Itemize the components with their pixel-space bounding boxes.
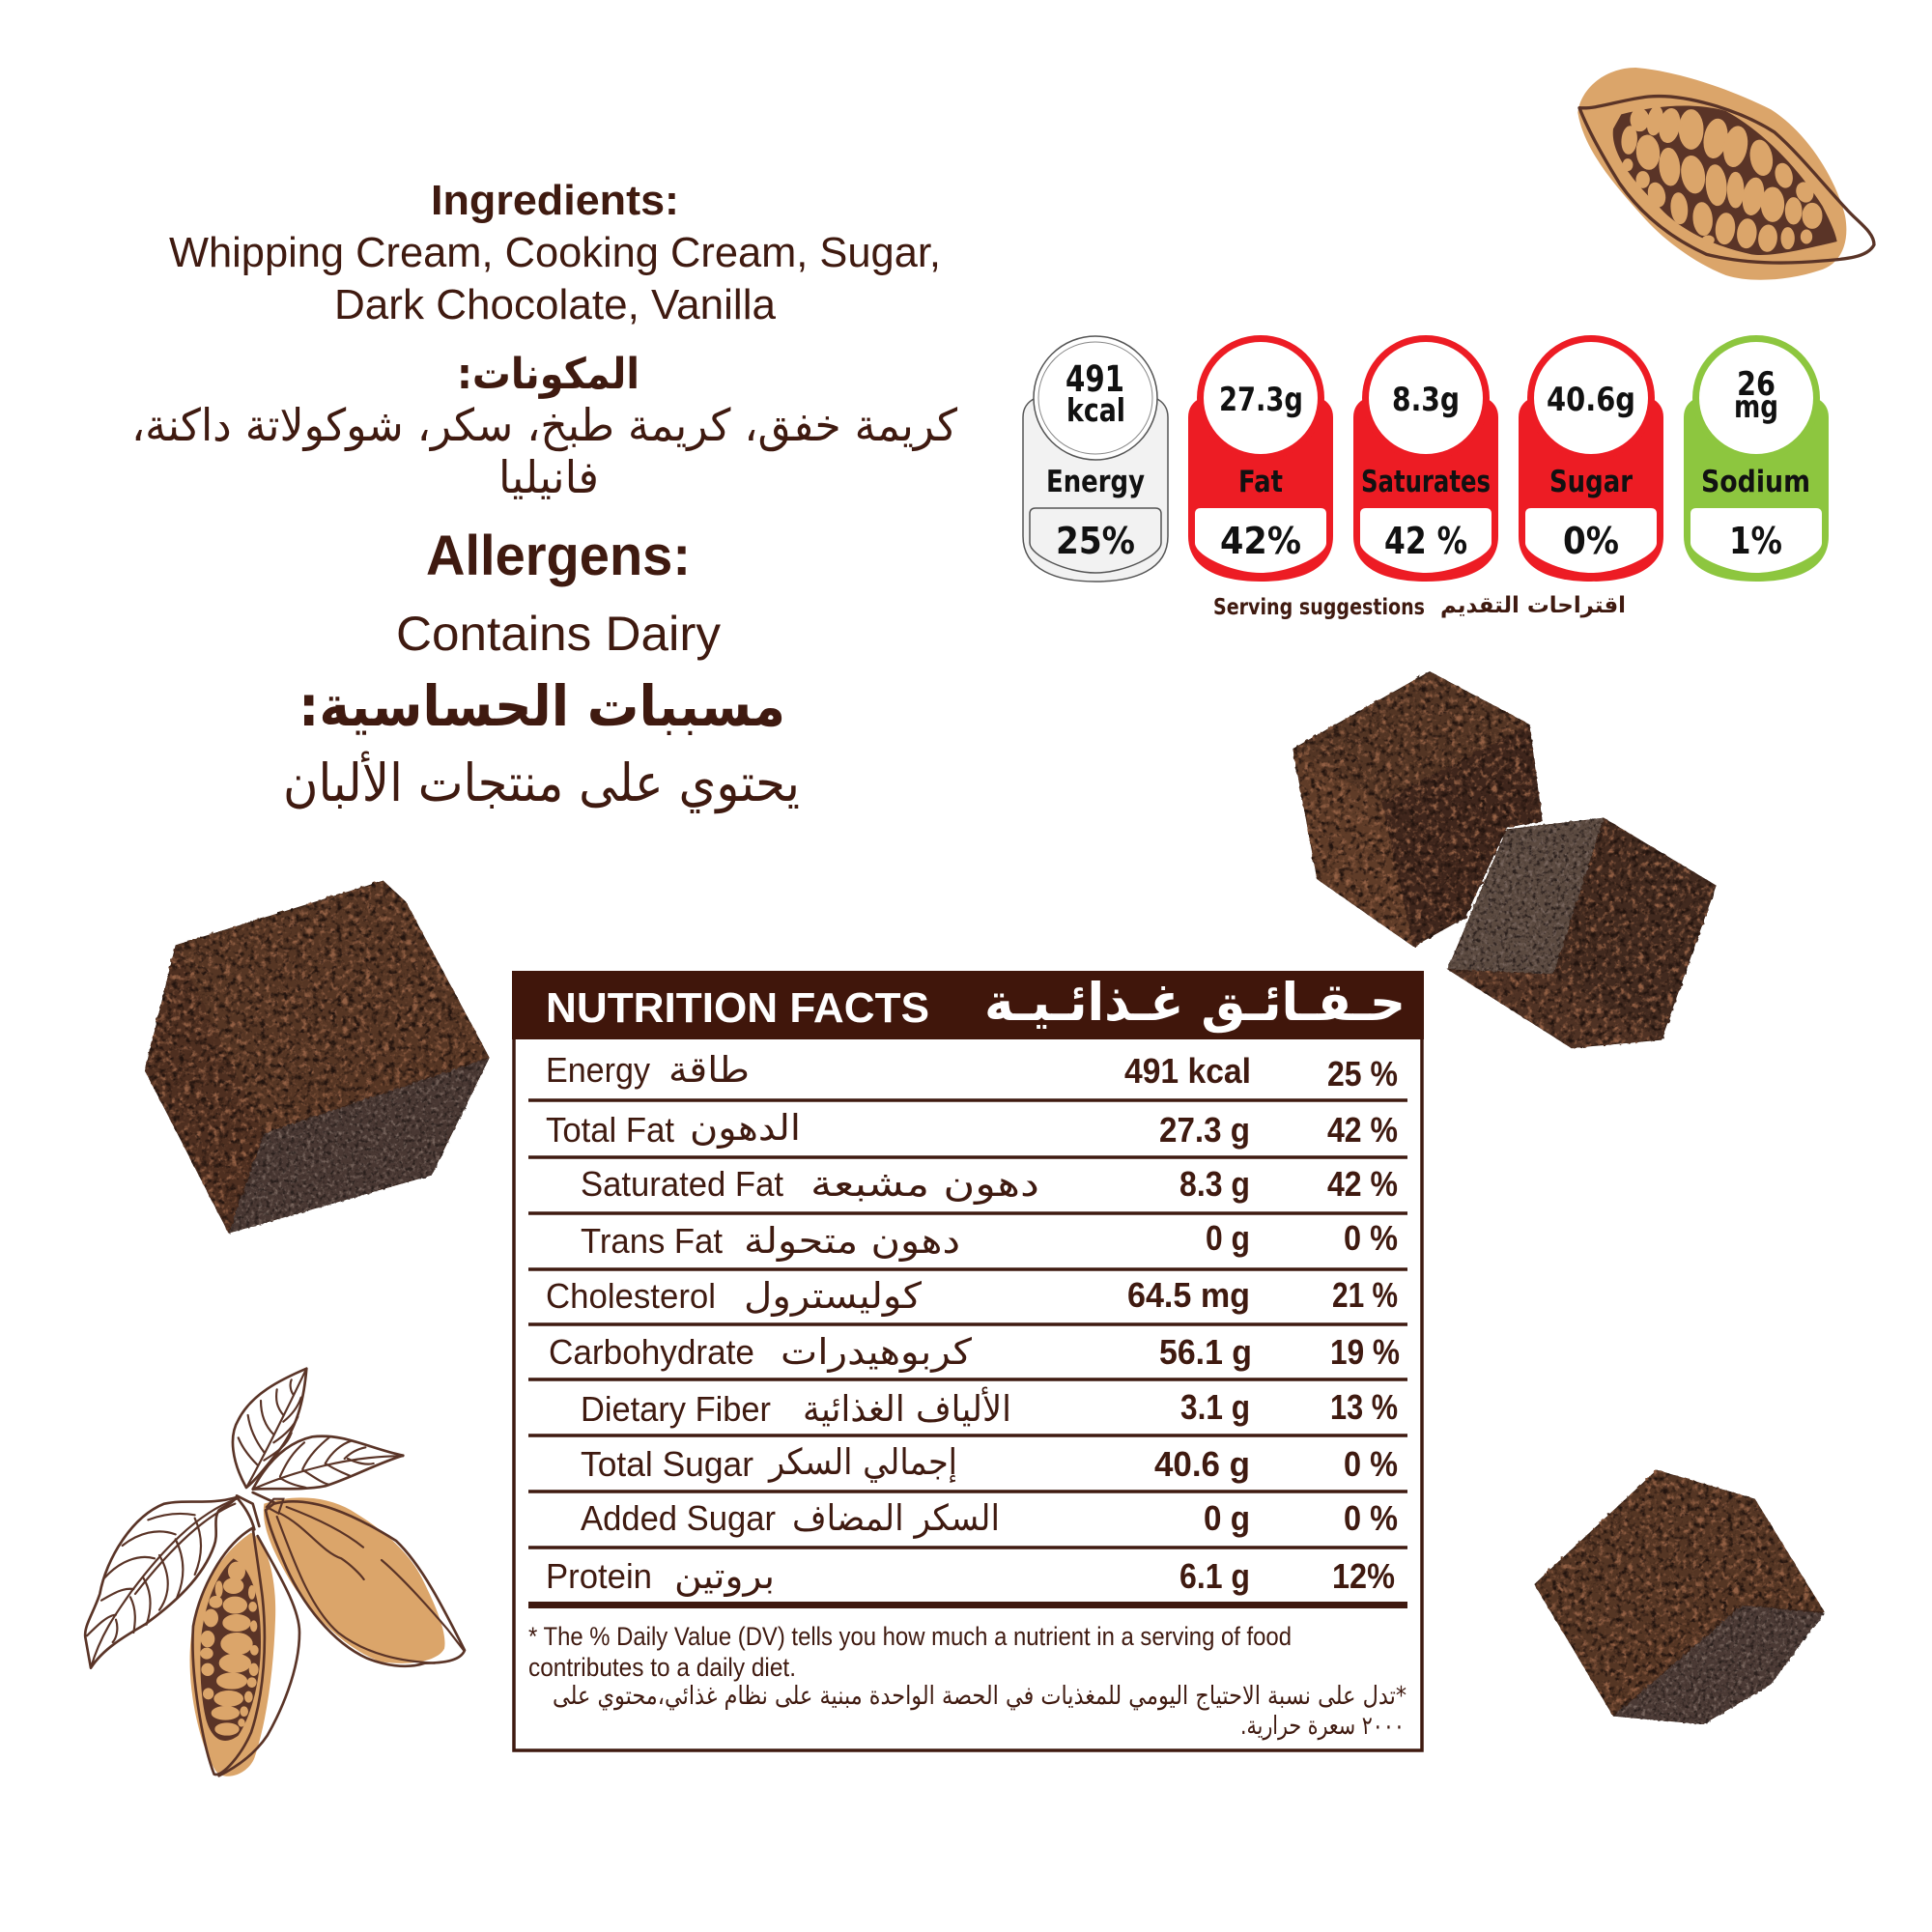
row: trans fat: دهون متحولة [744,1220,960,1262]
row: total sugar: 0 % [1344,1444,1398,1484]
leaf: top [233,1369,306,1488]
serving suggestions caption [1213,593,1626,620]
heading: ingredients: Ingredients: [431,177,679,224]
row: total fat: 27.3 g [1159,1110,1250,1150]
footnote [528,1622,1406,1741]
ingredients list English: Whipping Cream, Cooking Cream, Sugar, [169,229,941,276]
badge: sugar: Sugar [1549,465,1634,499]
row: total fat [546,1107,1398,1150]
row: energy: Energy [546,1050,650,1090]
heading: allergens Arabic: مسببات الحساسية: [298,673,785,739]
leaf: left [85,1497,237,1668]
open pod outline and seeds [192,1528,299,1776]
ingredients list English [169,229,941,328]
leaf: right [253,1436,403,1490]
row: added sugar [581,1497,1398,1539]
heading: ingredients Arabic: المكونات: [457,350,639,399]
badge: sodium: 1% [1729,520,1782,562]
badge: sodium [1684,335,1829,582]
serving suggestions caption: اقتراحات التقديم [1440,593,1626,618]
table header [512,971,1424,1039]
heading: allergens: Allergens: [426,525,691,587]
badge: sodium: 26 [1737,365,1776,404]
row: saturated fat [581,1163,1398,1205]
badge: energy: kcal [1066,391,1125,429]
table header: NUTRITION FACTS [546,984,929,1032]
badge: saturates [1353,335,1498,582]
row: energy [546,1049,1398,1094]
row: protein: 12% [1332,1556,1395,1596]
table frame [514,976,1422,1750]
row: trans fat [581,1218,1398,1262]
row: protein [546,1555,1395,1597]
row: protein: بروتين [674,1555,775,1597]
row: energy: 491 kcal [1124,1051,1251,1091]
footnote: *تدل على نسبة الاحتياج اليومي للمغذيات في الحصة الواحدة مبنية على نظام غذائي،محتوي على [553,1682,1406,1711]
badge: energy [1023,336,1168,582]
photo: chocolate cake cube left [145,881,490,1234]
footnote: contributes to a daily diet. [528,1653,796,1682]
nutrition facts table [512,971,1424,1750]
icon: cocoa branch with leaves and pods [85,1369,465,1776]
badge: sugar [1519,335,1663,582]
row: energy: 25 % [1327,1054,1398,1094]
badge: saturates: 42 % [1384,520,1467,562]
row: dietary fiber: 13 % [1330,1387,1398,1427]
row: total sugar: 40.6 g [1154,1444,1250,1484]
badge: sugar: 40.6g [1547,381,1635,419]
tan fill: closed pod [264,1497,445,1663]
badge: saturates: 8.3g [1392,381,1460,419]
row: dietary fiber [581,1386,1398,1430]
stem [237,1492,273,1529]
allergens text Arabic: يحتوي على منتجات الألبان [283,751,800,813]
row: total fat: Total Fat [546,1110,674,1150]
row: carbohydrate: Carbohydrate [549,1332,754,1372]
ingredients list Arabic: فانيليا [498,451,599,503]
row: total sugar: إجمالي السكر [767,1441,957,1483]
badge: sodium: Sodium [1701,465,1810,499]
icon: open cocoa pod [1577,68,1874,280]
row: dietary fiber: 3.1 g [1180,1387,1250,1427]
row: total fat: الدهون [690,1107,801,1149]
table header: حـقـائـق غـذائـيـة [984,972,1406,1033]
row: cholesterol: كوليسترول [744,1275,922,1317]
row: trans fat: 0 % [1344,1218,1398,1258]
nutrition badges row [1023,335,1829,620]
footnote: * The % Daily Value (DV) tells you how much a nutrient in a serving of food [528,1622,1292,1651]
badge: sugar: 0% [1563,520,1619,562]
photo: chocolate cake cube bottom right [1534,1470,1824,1724]
badge: energy: 491 [1065,358,1124,400]
row: cholesterol: 64.5 mg [1127,1275,1250,1315]
row: total sugar [581,1441,1398,1484]
row: dietary fiber: الألياف الغذائية [803,1386,1011,1430]
row: added sugar: السكر المضاف [792,1497,1000,1539]
badge: energy: Energy [1046,465,1145,499]
row: carbohydrate: كربوهيدرات [781,1331,972,1373]
ingredients list Arabic [131,399,957,503]
badge: fat: Fat [1238,465,1283,499]
row: added sugar: Added Sugar [581,1498,776,1538]
row: protein: 6.1 g [1179,1556,1250,1596]
row: added sugar: 0 % [1344,1498,1398,1538]
row: total sugar: Total Sugar [581,1444,753,1484]
ingredients list Arabic: كريمة خفق، كريمة طبخ، سكر، شوكولاتة داكنة، [131,399,957,452]
serving suggestions caption: Serving suggestions [1213,595,1425,620]
row: saturated fat: 42 % [1327,1164,1398,1204]
badge: sodium: mg [1734,388,1778,425]
row: cholesterol: 21 % [1332,1275,1398,1315]
row: saturated fat: 8.3 g [1179,1164,1250,1204]
row: total fat: 42 % [1327,1110,1398,1150]
row: cholesterol [546,1275,1398,1317]
ingredients list English: Dark Chocolate, Vanilla [334,281,777,328]
tan fill: open pod [190,1533,275,1776]
badge: fat: 27.3g [1219,381,1303,419]
footnote: ٢٠٠٠ سعرة حرارية. [1240,1712,1405,1741]
row: added sugar: 0 g [1204,1498,1250,1538]
row: energy: طاقة [668,1049,750,1091]
ingredients and allergens text block [131,177,957,813]
row: carbohydrate [549,1331,1400,1373]
allergens text: Contains Dairy [396,607,721,661]
row: cholesterol: Cholesterol [546,1276,716,1316]
row: trans fat: Trans Fat [581,1221,723,1261]
badge: saturates: Saturates [1361,465,1491,499]
photo: chocolate cake cubes pair [1293,671,1717,1048]
row: saturated fat: Saturated Fat [581,1164,783,1204]
badge: fat: 42% [1220,520,1301,562]
row: dietary fiber: Dietary Fiber [581,1389,771,1429]
row: protein: Protein [546,1556,652,1596]
row: saturated fat: دهون مشبعة [810,1163,1039,1205]
row: trans fat: 0 g [1206,1218,1250,1258]
row: carbohydrate: 19 % [1330,1332,1400,1372]
badge: energy: 25% [1056,520,1135,562]
row: carbohydrate: 56.1 g [1159,1332,1252,1372]
badge: fat [1188,335,1333,582]
closed pod outline [266,1499,465,1666]
